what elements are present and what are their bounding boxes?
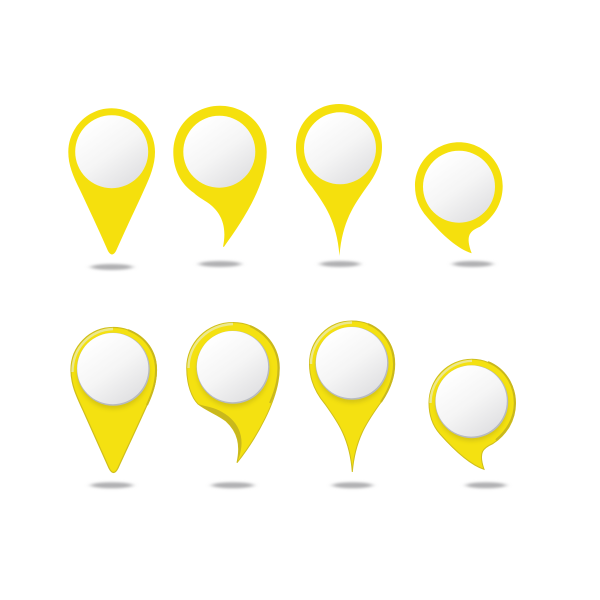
pin 7: bevelled needle	[310, 321, 395, 488]
pin 5: bevelled teardrop	[71, 328, 156, 488]
pin 4: flat speech bubble	[415, 142, 503, 267]
pin 6: bevelled curved tail	[187, 322, 279, 488]
pin 1: flat teardrop	[68, 108, 155, 270]
pin 8: bevelled speech bubble	[429, 359, 516, 488]
pin 2: flat curved tail	[173, 106, 267, 267]
pin 3: flat needle	[296, 104, 382, 267]
